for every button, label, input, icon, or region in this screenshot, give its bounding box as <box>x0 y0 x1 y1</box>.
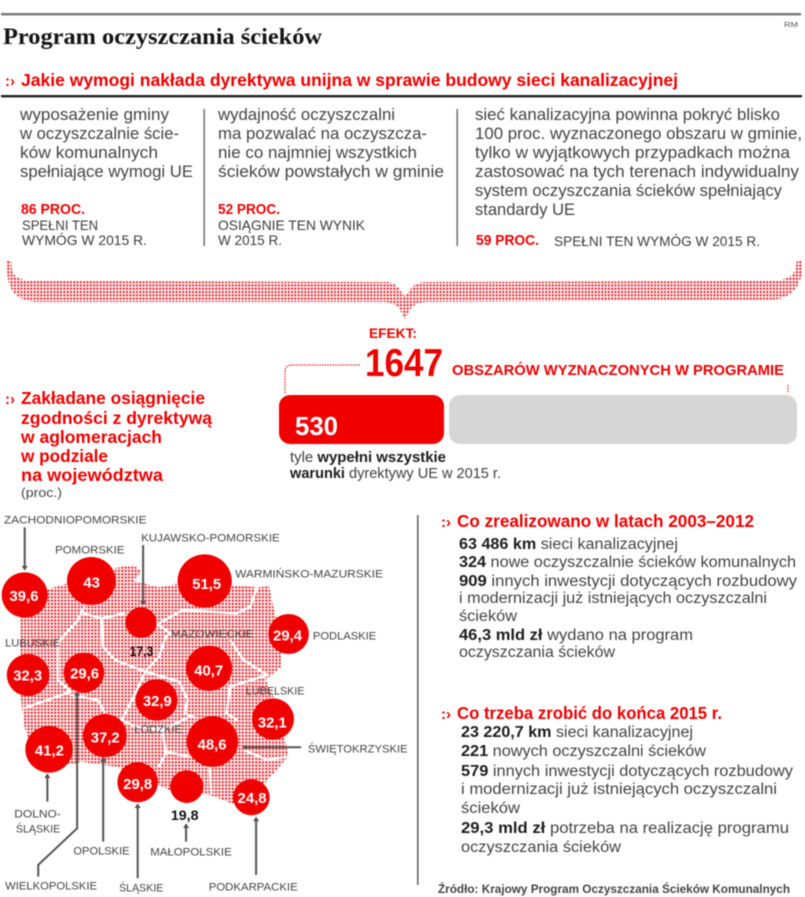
panel: achieved 2003-2012: oczyszczania ścieków <box>459 644 616 661</box>
bubble values: 29,6 <box>70 667 99 683</box>
region labels: ŚWIĘTOKRZYSKIE <box>308 742 408 755</box>
panel: requirement 1: 86 PROC. <box>21 201 85 218</box>
region labels: WARMIŃSKO-MAZURSKIE <box>235 567 383 580</box>
section heading: map: Zakładane osiągnięcie <box>21 388 205 408</box>
region labels: LUBUSKIE <box>5 638 60 650</box>
panel: to do by end of 2015: 29,3 mld zł potrzeba na realizację programu <box>461 820 789 837</box>
panel: requirement 2 <box>217 106 444 248</box>
panel: to do by end of 2015: :› <box>441 706 451 723</box>
region labels: ŚLĄSKIE <box>16 822 60 835</box>
panel: to do by end of 2015: i modernizacji już istniejących oczyszczalni <box>461 781 777 798</box>
panel: achieved 2003-2012: 909 innych inwestycji dotyczących rozbudowy <box>459 573 797 590</box>
region labels: OPOLSKIE <box>73 846 130 858</box>
panel: to do by end of 2015: ścieków <box>461 800 521 817</box>
bubble values: 40,7 <box>194 663 223 679</box>
section heading: requirements: :› <box>5 73 15 90</box>
region labels: ŚLĄSKIE <box>119 881 163 894</box>
panel: requirement 3: SPEŁNI TEN WYMÓG W 2015 R. <box>554 233 760 249</box>
bar caption: tyle wypełni wszystkie <box>290 450 446 466</box>
bubble values: 48,6 <box>198 738 227 754</box>
panel: requirement 2: W 2015 R. <box>218 232 282 248</box>
panel: to do by end of 2015: 23 220,7 km sieci kanalizacyjnej <box>461 724 693 741</box>
bar chart: 530 of 1647: 530 <box>295 411 338 441</box>
panel: requirement 3: standardy UE <box>475 201 575 219</box>
section heading: map: w podziale <box>20 446 108 466</box>
bubble values: 29,4 <box>273 629 303 645</box>
top rule <box>1 13 801 15</box>
panel: achieved 2003-2012: Co zrealizowano w latach 2003–2012 <box>457 511 754 531</box>
bubble values: 51,5 <box>192 577 221 593</box>
section heading: map: na województwa <box>21 465 163 485</box>
region labels: PODKARPACKIE <box>209 882 298 894</box>
panel: requirement 3: 100 proc. wyznaczonego obszaru w gminie, <box>475 125 802 143</box>
region labels: WIELKOPOLSKIE <box>5 880 97 892</box>
region labels: ZACHODNIOPOMORSKIE <box>4 514 146 526</box>
panel: requirement 2: nie co najmniej wszystkich <box>218 144 417 162</box>
bubble values: 19,8 <box>171 807 199 823</box>
panel: achieved 2003-2012: 46,3 mld zł wydano na program <box>459 627 693 644</box>
panel: requirement 2: ma pozwalać na oczyszcza- <box>218 125 427 143</box>
region labels: DOLNO- <box>14 808 61 820</box>
bubble values: 32,9 <box>143 694 172 710</box>
bubble values: 32,3 <box>13 669 42 685</box>
region labels <box>4 514 408 894</box>
panel: requirement 3: sieć kanalizacyjna powinna pokryć blisko <box>475 106 780 124</box>
panel: requirement 2: ścieków powstałych w gminie <box>218 163 444 181</box>
panel: achieved 2003-2012: 63 486 km sieci kanalizacyjnej <box>459 536 678 553</box>
section heading: map <box>5 388 212 500</box>
section heading: map: (proc.) <box>21 485 62 500</box>
region labels: MAZOWIECKIE <box>171 628 254 640</box>
areas caption: OBSZARÓW WYZNACZONYCH W PROGRAMIE <box>452 361 784 379</box>
panel: to do by end of 2015 <box>441 703 793 856</box>
section heading: map: :› <box>5 391 15 408</box>
bubble values: 37,2 <box>91 730 120 746</box>
panel: requirement 1: w oczyszczalnie ście- <box>19 125 179 143</box>
panel: to do by end of 2015: Co trzeba zrobić do końca 2015 r. <box>457 703 722 723</box>
panel: requirement 3: 59 PROC. <box>476 232 539 249</box>
panel: requirement 1: SPEŁNI TEN <box>22 217 98 233</box>
map of voivodeships <box>2 514 408 894</box>
panel: requirement 2: wydajność oczyszczalni <box>217 106 395 124</box>
panel: requirement 2: OSIĄGNIE TEN WYNIK <box>218 217 366 233</box>
bubble values: 39,6 <box>10 589 39 605</box>
panel: requirement 1: ków komunalnych <box>20 144 158 162</box>
dotted connector <box>285 365 788 393</box>
panel: requirement 3: zastosować na tych terenach indywidualny <box>475 163 800 181</box>
panel: to do by end of 2015: oczyszczania ścieków <box>461 839 622 856</box>
panel: requirement 2: 52 PROC. <box>218 201 280 218</box>
section heading: requirements <box>1 70 802 97</box>
bubble values: 29,8 <box>123 777 152 793</box>
panel: requirement 1 <box>19 106 193 248</box>
effect label: EFEKT: <box>369 325 417 341</box>
region labels: PODLASKIE <box>313 631 376 643</box>
region labels: KUJAWSKO-POMORSKIE <box>141 533 280 545</box>
panel: requirement 3: system oczyszczania ścieków spełniający <box>475 182 783 200</box>
big number 1647: 1647 <box>365 342 443 385</box>
bubble values: 32,1 <box>258 715 287 731</box>
bar chart: 530 of 1647 <box>279 395 797 444</box>
bar caption: warunki dyrektywy UE w 2015 r. <box>289 466 501 482</box>
bubble values: 24,8 <box>238 791 267 807</box>
section heading: map: w aglomeracjach <box>20 427 162 447</box>
panel: requirement 3 <box>475 106 802 249</box>
source: Źródło: Krajowy Program Oczyszczania Ścieków Komunalnych <box>438 883 790 896</box>
panel: requirement 1: spełniające wymogi UE <box>20 163 193 181</box>
bar caption <box>289 450 501 482</box>
arrowheads <box>22 566 259 828</box>
panel: to do by end of 2015: 579 innych inwestycji dotyczących rozbudowy <box>461 763 793 780</box>
credit RM: RM <box>784 22 798 29</box>
panel: requirement 3: tylko w wyjątkowych przypadkach można <box>475 144 791 162</box>
panel: achieved 2003-2012 <box>441 511 797 661</box>
bubbles <box>2 554 309 815</box>
title: Program oczyszczania ścieków <box>3 24 322 49</box>
panel: requirement 1: WYMÓG W 2015 R. <box>22 232 147 248</box>
panel: to do by end of 2015: 221 nowych oczyszczalni ścieków <box>461 743 707 760</box>
panel: requirement 1: wyposażenie gminy <box>19 106 170 124</box>
region labels: MAŁOPOLSKIE <box>150 847 232 859</box>
panel: achieved 2003-2012: :› <box>441 514 451 531</box>
panel: achieved 2003-2012: i modernizacji już istniejących oczyszczalni <box>459 590 767 607</box>
bubble values <box>10 576 303 823</box>
bubble values: 41,2 <box>35 744 64 760</box>
section heading: map: zgodności z dyrektywą <box>21 408 212 428</box>
panel: achieved 2003-2012: 324 nowe oczyszczalnie ścieków komunalnych <box>459 554 796 571</box>
region labels: LUBELSKIE <box>246 686 304 698</box>
region labels: ŁÓDZKIE <box>134 723 182 736</box>
dotted bracket <box>6 260 802 319</box>
panel: achieved 2003-2012: ścieków <box>459 608 518 625</box>
bubble values: 43 <box>83 576 100 592</box>
bubble values: 17,3 <box>130 643 153 659</box>
leader lines <box>25 527 301 878</box>
region labels: POMORSKIE <box>55 544 124 556</box>
section heading: requirements: Jakie wymogi nakłada dyrektywa unijna w sprawie budowy sieci kanalizacyjnej <box>21 70 678 90</box>
